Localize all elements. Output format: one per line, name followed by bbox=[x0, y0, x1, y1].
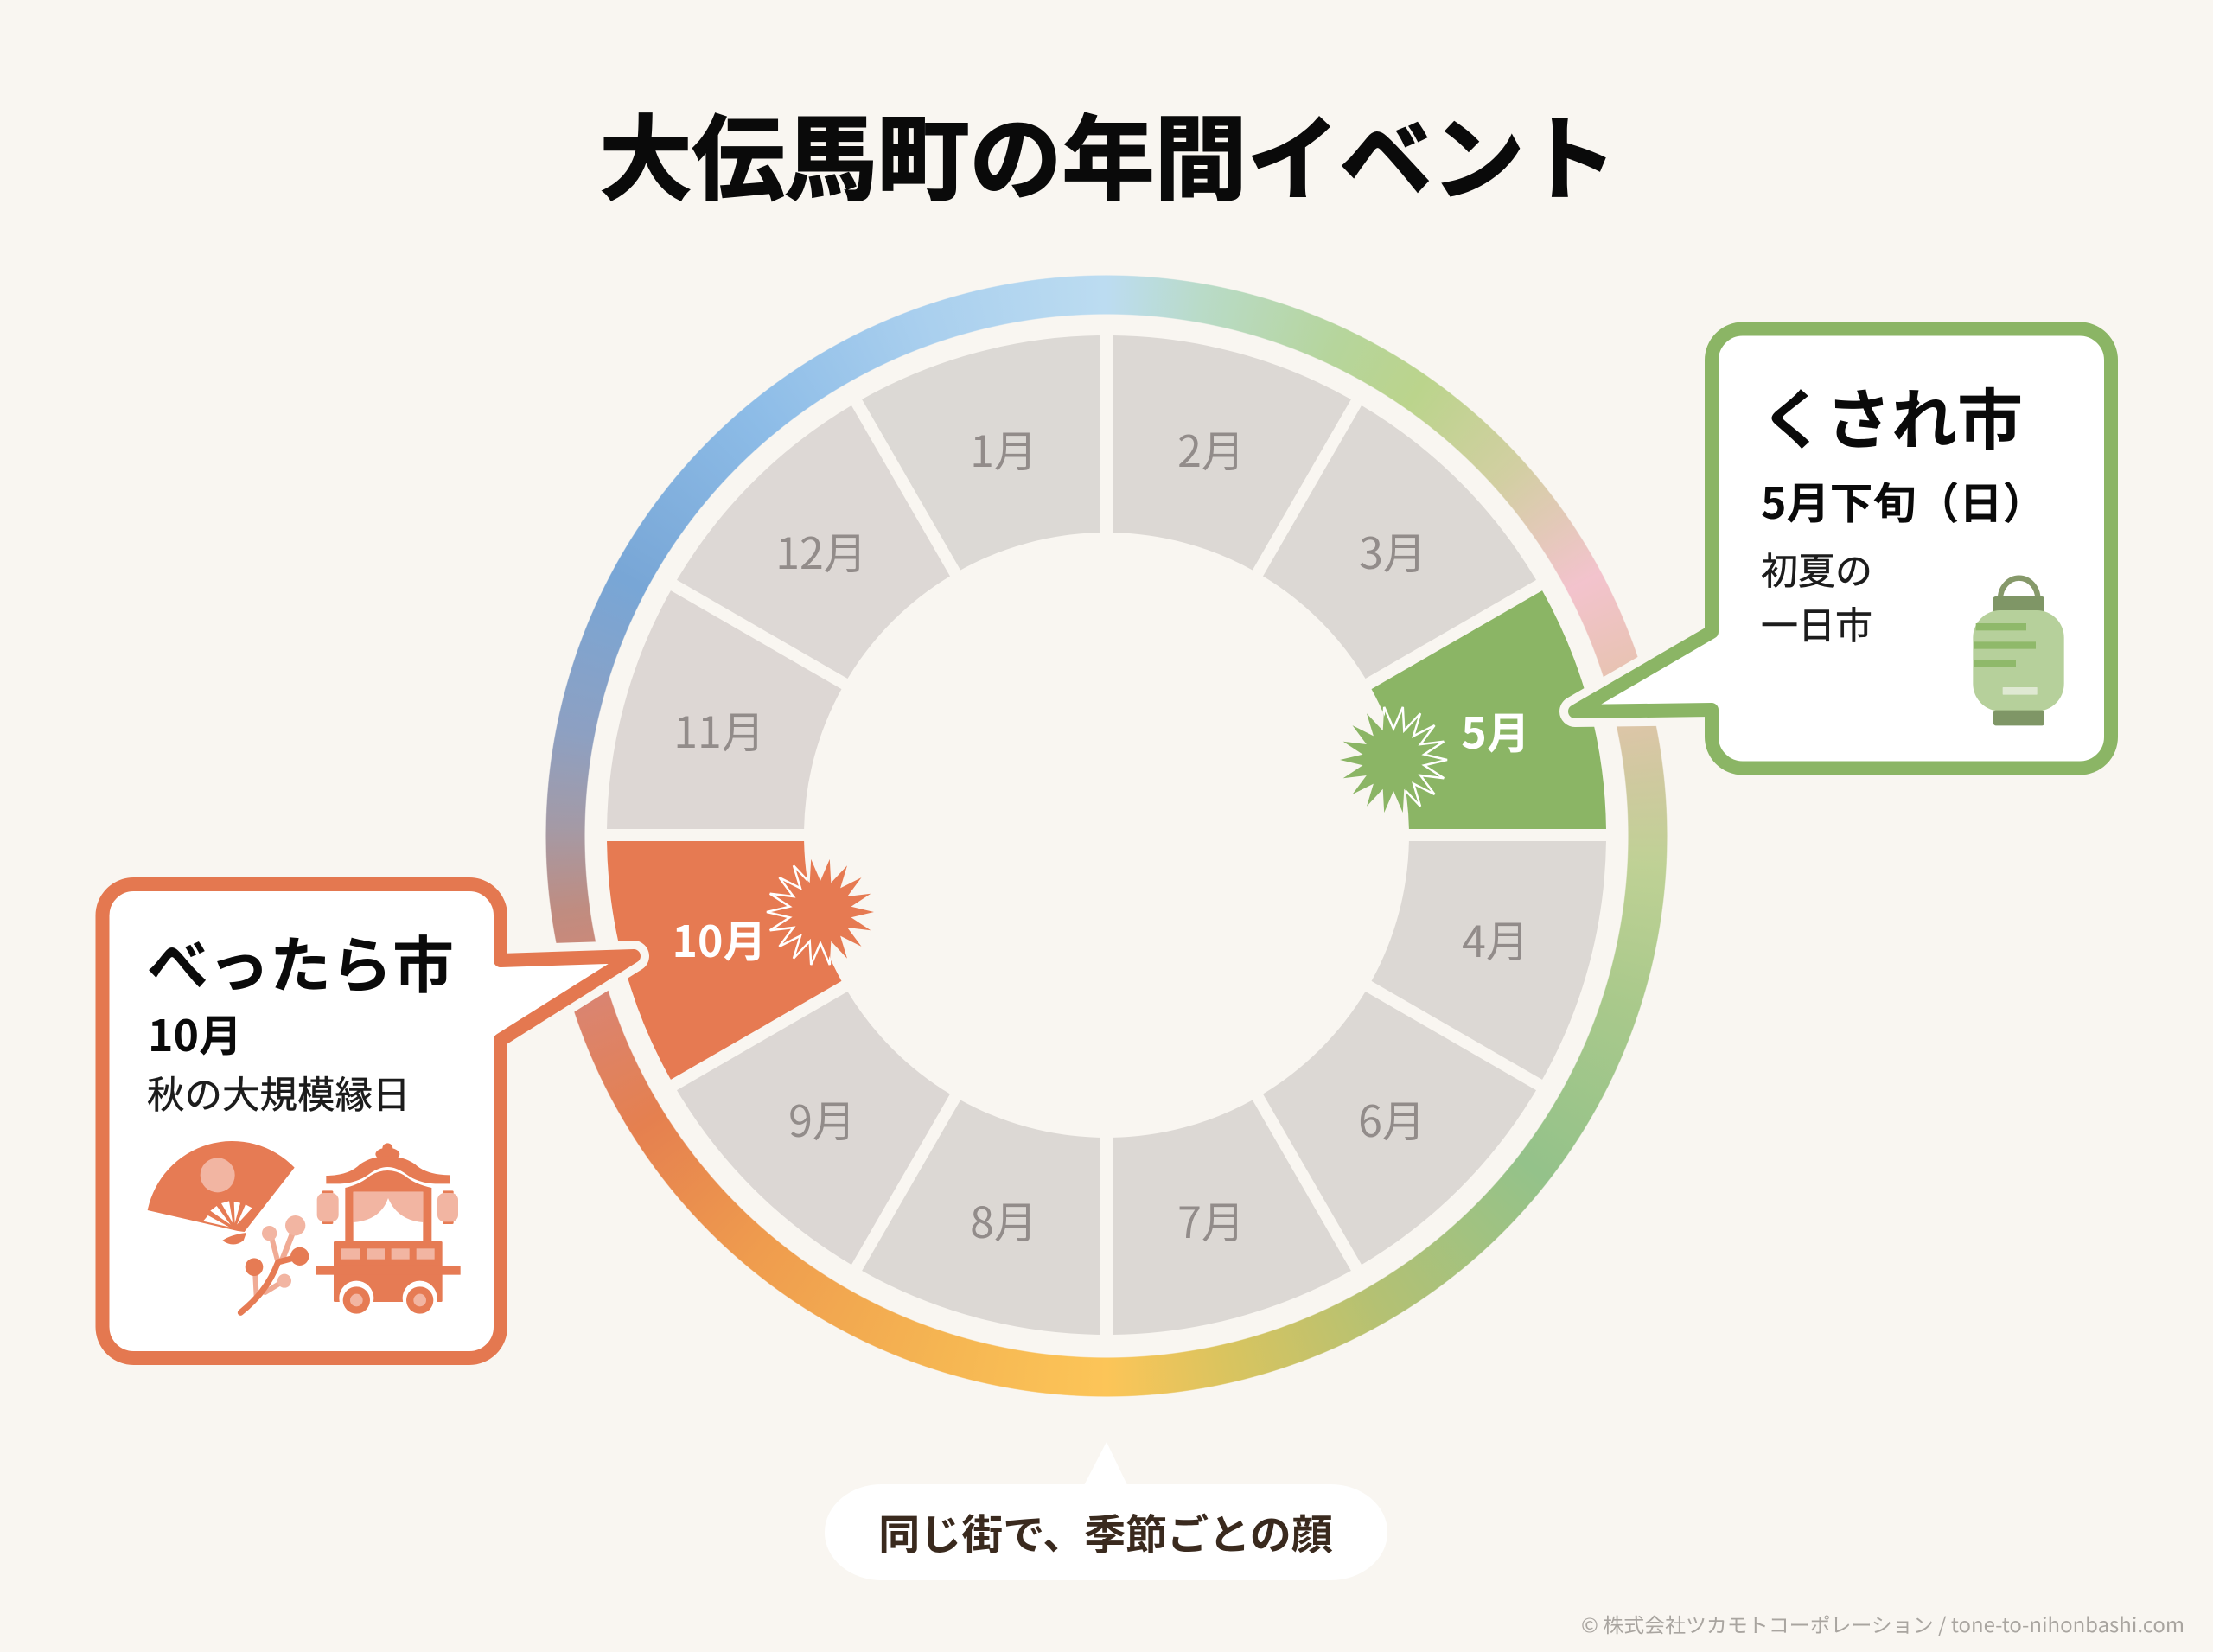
segment: 4月 bbox=[1358, 792, 1621, 1084]
icons: fan, branch and festival cart bbox=[148, 1141, 461, 1316]
label: 5月: 5月 bbox=[1461, 699, 1530, 762]
callout box bbox=[1575, 328, 2111, 768]
event description line 2: 一日市 bbox=[1761, 596, 1872, 650]
label: 3月: 3月 bbox=[1359, 520, 1426, 582]
callout box bbox=[102, 884, 634, 1358]
label: 11月: 11月 bbox=[673, 698, 765, 761]
segment: 2月 bbox=[1063, 321, 1355, 584]
segment: 11月 bbox=[592, 586, 855, 878]
icon: festival cart bbox=[316, 1143, 461, 1316]
event description: 秋の大規模縁日 bbox=[147, 1065, 410, 1119]
event date: 5月下旬（日） bbox=[1761, 469, 2045, 532]
label: 1月: 1月 bbox=[970, 418, 1037, 480]
segment: 9月 bbox=[666, 955, 986, 1276]
segment: 8月 bbox=[858, 1087, 1150, 1349]
event name: べったら市 bbox=[147, 917, 454, 1005]
event date: 10月 bbox=[148, 1002, 242, 1064]
event name: くされ市 bbox=[1760, 367, 2023, 462]
label: 7月: 7月 bbox=[1177, 1189, 1245, 1251]
label: 8月: 8月 bbox=[970, 1189, 1037, 1251]
segment: 3月 bbox=[1227, 394, 1547, 715]
bubble pointer bbox=[1082, 1442, 1129, 1489]
label: 12月: 12月 bbox=[775, 520, 867, 582]
segment: 7月 bbox=[1063, 1087, 1355, 1349]
event description: 初夏の bbox=[1761, 542, 1872, 596]
icon: folding fan bbox=[148, 1141, 295, 1244]
icon: paper lantern bbox=[1973, 578, 2064, 725]
tagline bubble bbox=[825, 1442, 1387, 1580]
segment: 12月 bbox=[666, 394, 986, 715]
segment: 6月 bbox=[1227, 955, 1547, 1276]
callout: くされ市 bbox=[1575, 328, 2111, 768]
seasonal gradient ring bbox=[545, 275, 1668, 1397]
callout: べったら市 bbox=[102, 884, 634, 1358]
segment: 5月 highlighted bbox=[1358, 586, 1621, 878]
burst: 5月 bbox=[1340, 707, 1447, 813]
title: 大伝馬町の年間イベント bbox=[599, 85, 1617, 219]
label: 4月: 4月 bbox=[1462, 908, 1529, 970]
month wheel bbox=[592, 321, 1621, 1349]
label: 9月: 9月 bbox=[788, 1088, 856, 1150]
bubble body bbox=[825, 1484, 1387, 1580]
tagline text: 同じ街で、季節ごとの顔 bbox=[878, 1501, 1333, 1561]
copyright: © 株式会社ツカモトコーポレーション / tone-to-nihonbashi.com bbox=[1581, 1609, 2184, 1638]
segment: 10月 highlighted bbox=[592, 792, 855, 1084]
label: 10月: 10月 bbox=[673, 908, 766, 970]
label: 6月: 6月 bbox=[1358, 1088, 1425, 1150]
icon: plum branch bbox=[240, 1215, 309, 1312]
callout tail halo bbox=[501, 956, 634, 1040]
label: 2月: 2月 bbox=[1177, 418, 1245, 480]
burst: 10月 bbox=[767, 859, 874, 965]
callout tail halo bbox=[1575, 632, 1712, 711]
segment: 1月 bbox=[858, 321, 1150, 584]
